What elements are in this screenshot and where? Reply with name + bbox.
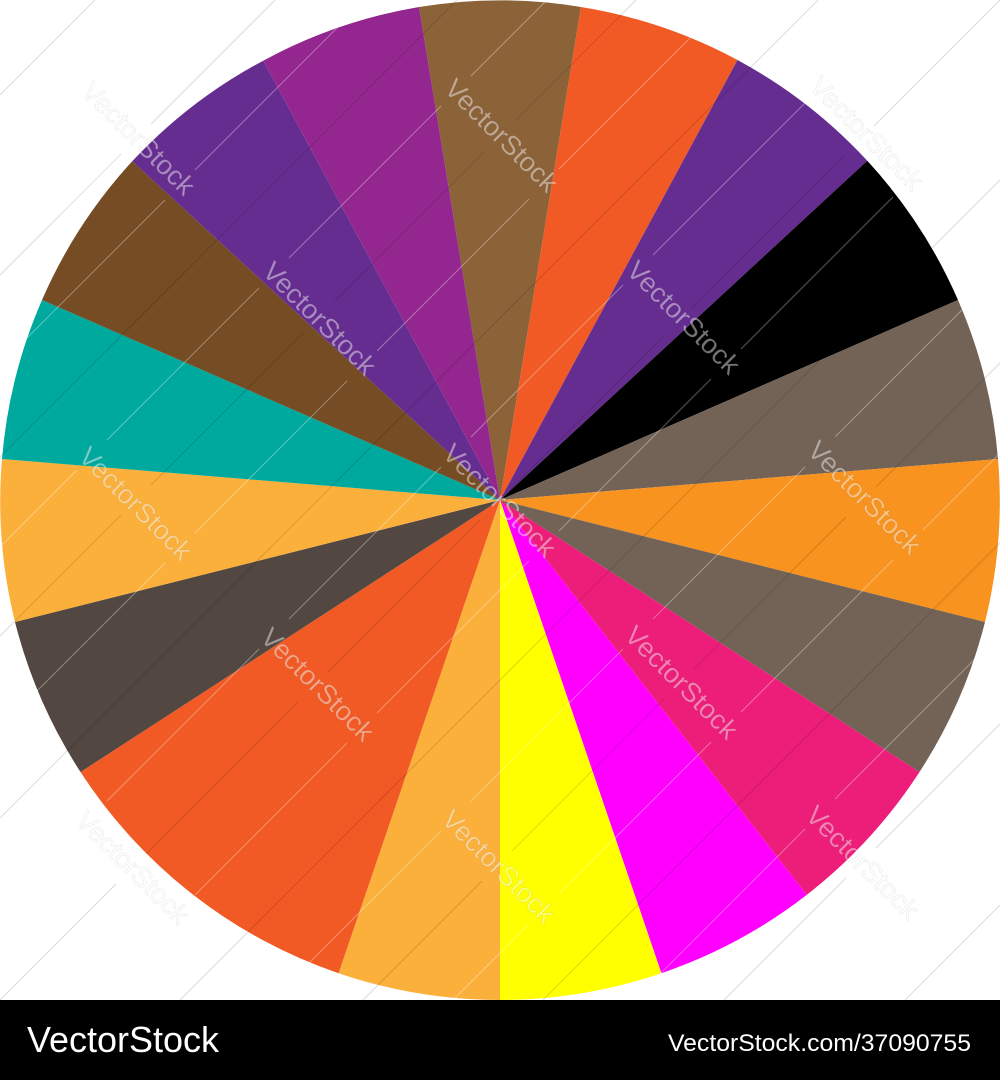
wedge: magenta <box>500 500 807 973</box>
watermarks: VectorStock <box>436 804 561 930</box>
watermarks: VectorStock <box>802 435 927 561</box>
watermarks: VectorStock <box>621 255 746 381</box>
wedge: light orange left <box>0 459 500 622</box>
wedge: teal <box>2 300 500 500</box>
watermarks: VectorStock <box>255 622 380 748</box>
wedge: violet <box>263 7 500 500</box>
footer bar <box>0 1000 1000 1080</box>
watermarks: VectorStock <box>804 71 929 197</box>
watermarks: VectorStock <box>76 76 201 202</box>
wedge: purple left <box>132 61 500 500</box>
wedge: brown top <box>419 0 581 500</box>
wedge: purple <box>500 60 867 500</box>
footer logo text: VectorStock <box>27 1019 220 1060</box>
wedge: brown left <box>42 161 500 500</box>
watermarks: VectorStock <box>70 805 195 931</box>
wedge: orange <box>500 7 738 500</box>
wedge: yellow <box>500 500 661 1000</box>
footer image id: VectorStock.com/37090755 <box>668 1030 971 1057</box>
watermarks: VectorStock <box>73 441 198 567</box>
watermarks: VectorStock <box>257 256 382 382</box>
wedge: light orange bottom <box>339 500 500 1000</box>
wedge: amber <box>500 459 1000 622</box>
wedge: taupe upper <box>500 300 998 500</box>
wedge: dark brown-grey <box>15 500 500 772</box>
watermarks: VectorStock <box>439 73 564 199</box>
wedge: black <box>500 161 958 500</box>
watermarks <box>70 71 929 931</box>
wedge: pink <box>500 500 920 895</box>
watermarks: VectorStock <box>619 620 744 746</box>
watermarks: VectorStock <box>437 438 562 564</box>
wedge: taupe lower <box>500 500 985 772</box>
watermarks: VectorStock <box>800 800 925 926</box>
wedge: large orange <box>80 500 500 973</box>
